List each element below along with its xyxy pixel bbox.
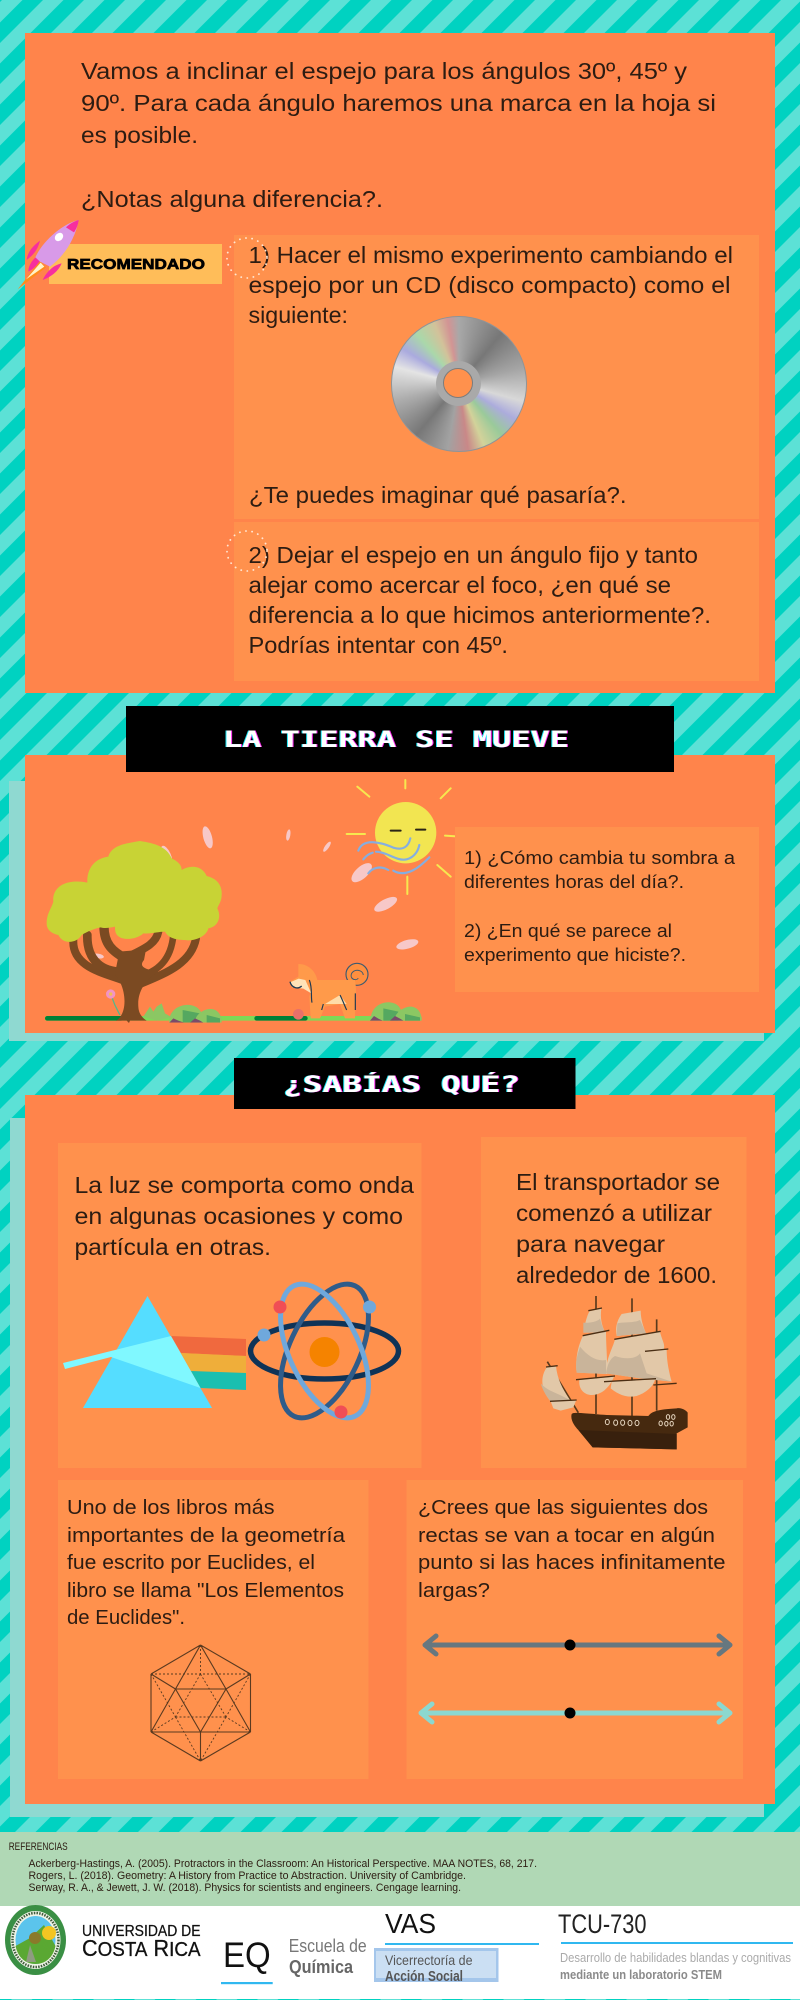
logo: Vicerrectoría de Acción Social: Acción Social	[385, 1968, 463, 1985]
tree	[47, 841, 222, 1023]
panel: CD experiment: siguiente:	[248, 302, 348, 328]
label: recomendado: RECOMENDADO	[67, 256, 205, 273]
card: Euclid: fue escrito por Euclides, el	[67, 1551, 315, 1574]
card: protractor: comenzó a utilizar	[516, 1200, 712, 1226]
card: light: en algunas ocasiones y como	[74, 1203, 403, 1229]
card: Euclid	[58, 1480, 368, 1779]
icon: prism	[63, 1296, 246, 1408]
card: parallel lines: punto si las haces infinitamente	[418, 1551, 726, 1574]
panel: fixed angle experiment: Podrías intentar con 45º.	[248, 632, 508, 658]
petals	[92, 825, 419, 959]
heading: ¿Sabías qué?	[234, 1058, 576, 1109]
icon: compact disc	[391, 316, 527, 452]
label: recomendado	[49, 244, 222, 284]
text: introduction	[81, 58, 716, 212]
card: Euclid: de Euclides".	[67, 1606, 185, 1629]
arrow: line 2	[421, 1704, 730, 1722]
heading: La Tierra se mueve: LA TIERRA SE MUEVE	[223, 728, 569, 753]
ground	[45, 1016, 422, 1021]
card: parallel lines: ¿Crees que las siguientes dos	[418, 1496, 708, 1519]
logo: Escuela de Química: Química	[289, 1957, 354, 1977]
dotted circle: number 2	[227, 531, 267, 571]
logo: Universidad de Costa Rica crest	[5, 1905, 66, 1975]
card: protractor	[481, 1137, 746, 1468]
icon: icosahedron	[151, 1645, 250, 1761]
card: parallel lines: rectas se van a tocar en algún	[418, 1524, 715, 1547]
panel: questions: diferentes horas del día?.	[464, 871, 684, 892]
panel: questions: 1) ¿Cómo cambia tu sombra a	[464, 847, 736, 868]
sun	[347, 780, 460, 894]
panel: references: Rogers, L. (2018). Geometry: A History from Practice to Abstraction. University of Cambridge.	[28, 1870, 466, 1882]
panel: references: REFERENCIAS	[9, 1841, 68, 1853]
heading: ¿Sabías qué?: ¿SABÍAS QUÉ?	[283, 1072, 520, 1098]
logo: Vicerrectoría de Acción Social	[374, 1908, 539, 1985]
logo: TCU-730: mediante un laboratorio STEM	[560, 1968, 722, 1982]
text: introduction: Vamos a inclinar el espejo para los ángulos 30º, 45º y	[81, 58, 688, 84]
card: Euclid: Uno de los libros más	[67, 1496, 274, 1519]
dog	[290, 963, 368, 1020]
card: protractor: para navegar	[516, 1231, 665, 1257]
icon: rocket	[18, 220, 79, 289]
panel: questions: experimento que hiciste?.	[464, 944, 686, 965]
panel: ¿Sabías qué?	[10, 1095, 775, 1817]
panel: logos	[0, 1905, 800, 1999]
panel: CD experiment: espejo por un CD (disco compacto) como el	[248, 272, 730, 298]
logo text: Universidad de Costa Rica: UNIVERSIDAD DE	[82, 1923, 200, 1940]
illustration: tree, sun, dog and petals	[45, 780, 460, 1023]
text: introduction: es posible.	[81, 122, 198, 148]
card: protractor: El transportador se	[516, 1169, 720, 1195]
panel: questions: 2) ¿En qué se parece al	[464, 920, 672, 941]
logo: Escuela de Química: Escuela de	[289, 1936, 367, 1956]
logo text: Universidad de Costa Rica	[82, 1923, 201, 1961]
panel: fixed angle experiment: diferencia a lo que hicimos anteriormente?.	[248, 602, 711, 628]
panel: fixed angle experiment: 2) Dejar el espejo en un ángulo fijo y tanto	[248, 542, 698, 568]
icon: sailing ship	[541, 1296, 688, 1449]
panel: CD experiment: ¿Te puedes imaginar qué pasaría?.	[249, 482, 626, 508]
icon: atom	[250, 1271, 398, 1431]
panel: fixed angle experiment	[234, 522, 759, 681]
logo: TCU-730	[558, 1909, 793, 1982]
arrow: line 1	[425, 1636, 730, 1654]
card: light: partícula en otras.	[74, 1234, 271, 1260]
flower	[106, 989, 120, 1015]
card: light: La luz se comporta como onda	[74, 1172, 414, 1198]
logo: Vicerrectoría de Acción Social: Vicerrectoría de	[385, 1952, 473, 1968]
panel: questions	[455, 827, 759, 992]
text: introduction: ¿Notas alguna diferencia?.	[81, 186, 383, 212]
panel: CD experiment	[234, 235, 759, 519]
dotted circle: number 1	[227, 238, 267, 278]
panel: experiment instructions	[18, 33, 775, 693]
text: introduction: 90º. Para cada ángulo haremos una marca en la hoja si	[81, 90, 716, 116]
heading: La Tierra se mueve	[126, 706, 674, 772]
panel: references: Serway, R. A., & Jewett, J. W. (2018). Physics for scientists and engineers. Cengage learning.	[28, 1882, 461, 1894]
logo: Escuela de Química: EQ	[223, 1936, 271, 1975]
panel: references: Ackerberg-Hastings, A. (2005). Protractors in the Classroom: An Historical Perspective. MAA NOTES, 68, 217.	[28, 1858, 537, 1870]
panel: CD experiment: 1) Hacer el mismo experimento cambiando el	[248, 242, 733, 268]
card: Euclid: libro se llama "Los Elementos	[67, 1579, 344, 1602]
card: Euclid: importantes de la geometría	[67, 1524, 346, 1547]
logo text: Universidad de Costa Rica: COSTA RICA	[82, 1935, 201, 1961]
card: protractor: alrededor de 1600.	[516, 1262, 717, 1288]
panel: La Tierra se mueve	[9, 755, 775, 1041]
card: parallel lines	[406, 1480, 743, 1779]
logo: TCU-730: TCU-730	[558, 1909, 646, 1939]
panel: references	[0, 1832, 800, 1906]
logo: Vicerrectoría de Acción Social: VAS	[385, 1908, 436, 1939]
card: light	[58, 1143, 422, 1468]
bushes	[143, 1002, 422, 1023]
card: parallel lines: largas?	[418, 1579, 490, 1602]
panel: fixed angle experiment: alejar como acercar el foco, ¿en qué se	[248, 572, 671, 598]
logo: Escuela de Química	[221, 1936, 367, 1984]
